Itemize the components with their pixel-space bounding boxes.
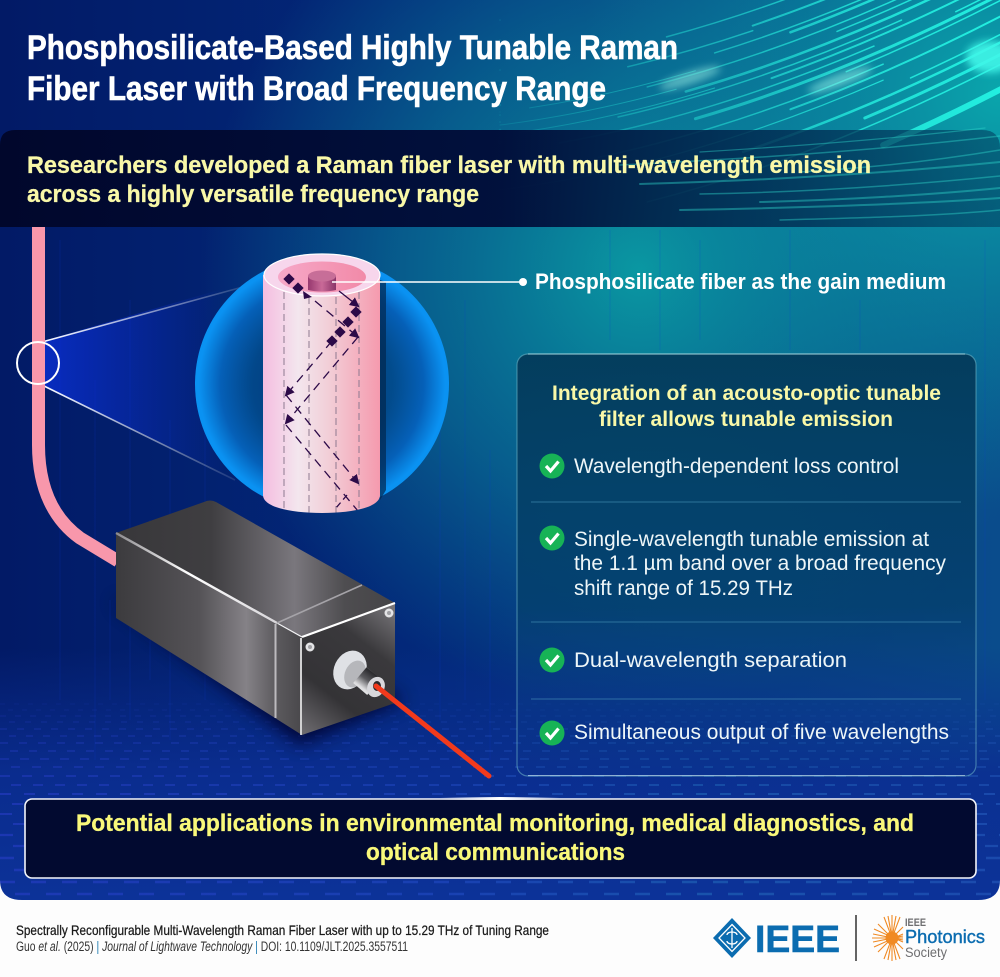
panel heading [552, 381, 941, 431]
citation [16, 922, 549, 954]
light path diamonds [283, 273, 362, 347]
applications callout: optical communications [366, 839, 625, 866]
item: dual wavelength: Dual-wavelength separation [574, 649, 847, 672]
applications callout: Potential applications in environmental monitoring, medical diagnostics, and [76, 810, 914, 837]
item: five wavelengths: Simultaneous output of five wavelengths [574, 721, 949, 744]
Photonics Society logo: Society [905, 945, 947, 960]
citation: Spectrally Reconfigurable Multi-Wavelength Raman Fiber Laser with up to 15.29 THz of Tuning Range [16, 922, 549, 938]
item: single wavelength: Single-wavelength tunable emission at [574, 528, 929, 551]
optical fiber [38, 227, 118, 561]
subtitle band: across a highly versatile frequency range [27, 181, 479, 208]
item: loss control: Wavelength-dependent loss control [574, 455, 899, 478]
floor dot grid [0, 704, 1000, 894]
panel heading: filter allows tunable emission [599, 407, 893, 431]
subtitle band [0, 128, 1000, 227]
Photonics Society logo [872, 915, 985, 961]
fiber cross-section cylinder [263, 254, 386, 513]
streak glows [658, 41, 1000, 97]
IEEE logo [713, 918, 840, 961]
panel: tunable emission [517, 354, 976, 776]
title [27, 29, 678, 108]
item: single wavelength [540, 526, 946, 600]
blue magnifier disc [195, 257, 449, 511]
light path rays [286, 291, 358, 511]
citation: Guo et al. (2025) | Journal of Lightwave Technology | DOI: 10.1109/JLT.2025.3557511 [16, 939, 408, 954]
subtitle band: Researchers developed a Raman fiber laser with multi-wavelength emission [27, 152, 871, 179]
laser box shadow [112, 600, 405, 745]
laser beam [376, 686, 489, 776]
light streaks [499, 0, 1000, 186]
applications callout [25, 798, 976, 878]
panel heading: Integration of an acousto-optic tunable [552, 381, 941, 405]
cladding boundaries [284, 292, 359, 513]
item: single wavelength: shift range of 15.29 THz [574, 577, 793, 600]
laser module box [116, 500, 395, 735]
footer [0, 880, 1000, 977]
title: Fiber Laser with Broad Frequency Range [27, 70, 606, 108]
item: single wavelength: the 1.1 µm band over a broad frequency [574, 552, 946, 575]
callout: gain medium: Phosphosilicate fiber as the gain medium [535, 269, 946, 294]
callout: gain medium [332, 269, 946, 294]
zoom circle on fiber [17, 342, 59, 384]
fiber core [308, 270, 336, 292]
Photonics Society logo: IEEE [905, 917, 926, 929]
screws [306, 608, 394, 652]
magnified zoom beam [40, 275, 270, 495]
IEEE logo: IEEE [755, 919, 840, 961]
title: Phosphosilicate-Based Highly Tunable Raman [27, 29, 678, 67]
Photonics Society logo: Photonics [905, 927, 985, 947]
output nozzle [327, 645, 388, 700]
